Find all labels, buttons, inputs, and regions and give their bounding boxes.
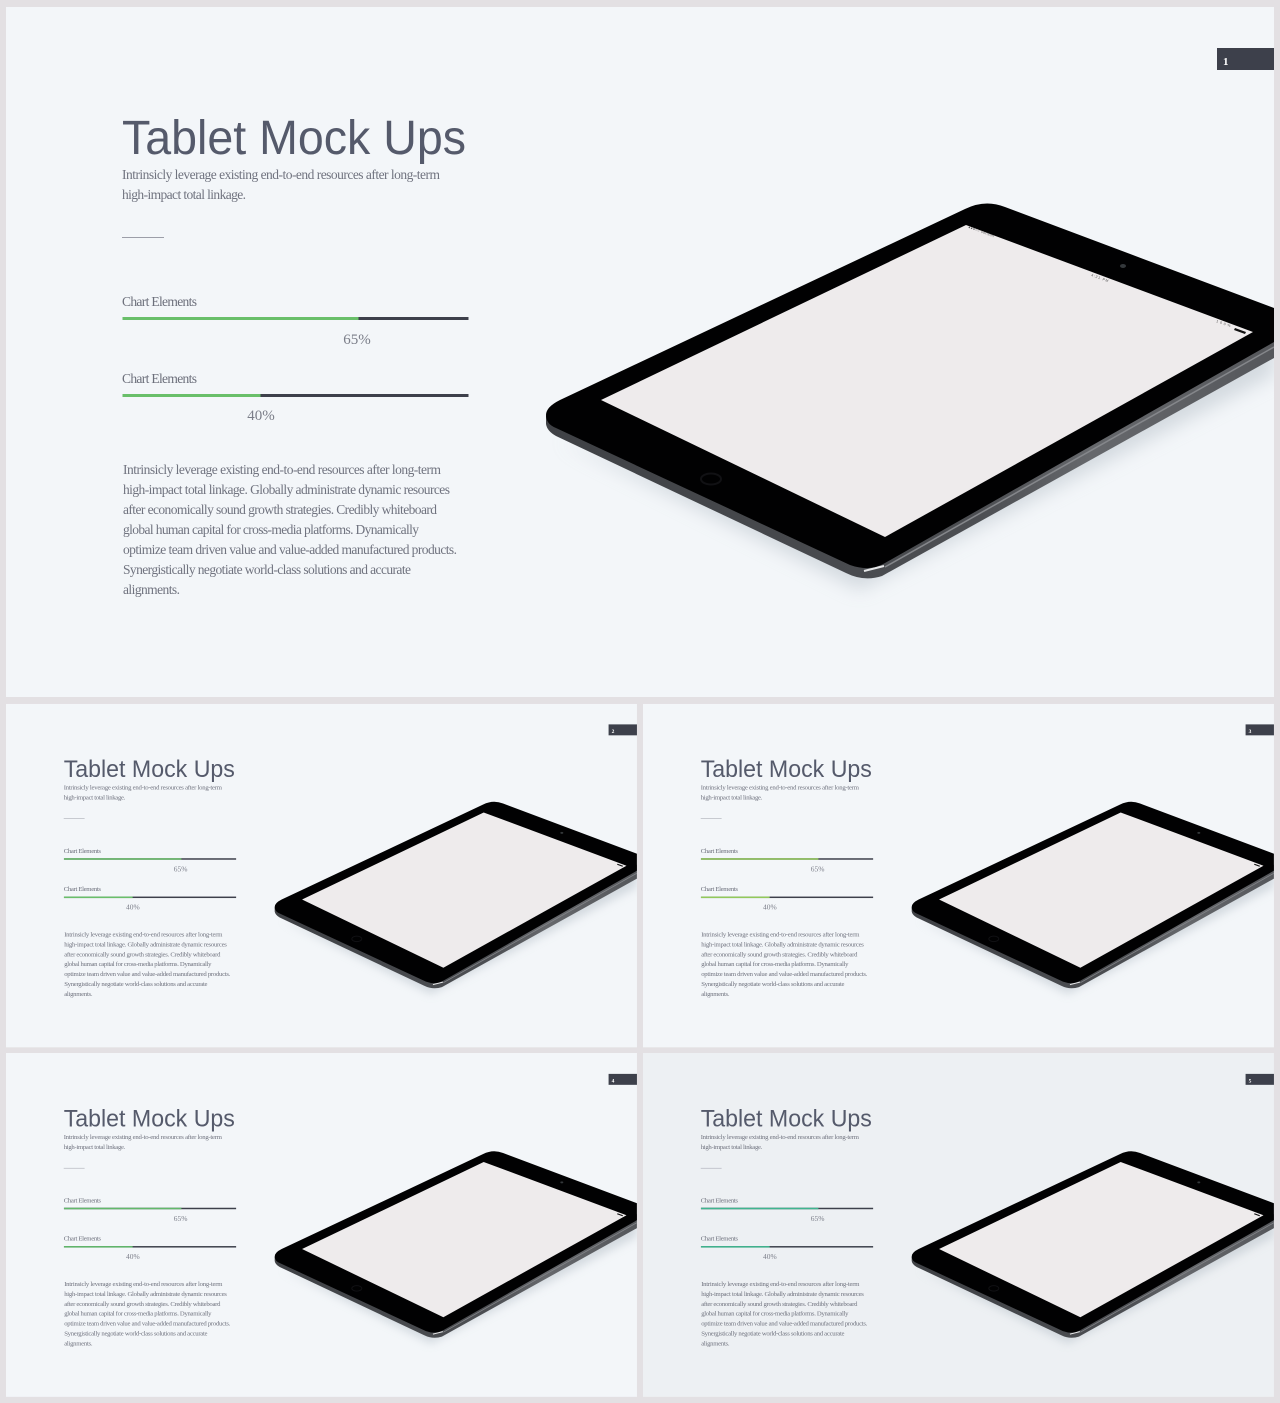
body paragraph: alignments. [64,1341,93,1348]
body paragraph [123,462,457,597]
page number tag 1: 1 [1223,56,1228,68]
subtitle: high-impact total linkage. [64,1144,126,1151]
body paragraph: global human capital for cross-media platforms. Dynamically [123,522,419,537]
progress bar 40%: Chart Elements [701,886,738,893]
progress bar 65% [64,848,236,874]
body paragraph: alignments. [701,991,730,998]
body paragraph: Intrinsicly leverage existing end-to-end resources after long-term [701,1281,860,1288]
subtitle [64,1134,223,1151]
title: Tablet Mock Ups [701,1106,872,1133]
tablet mockup: ●●●○○ Verizon [968,225,994,238]
body paragraph: Synergistically negotiate world-class solutions and accurate [701,981,845,988]
body paragraph: after economically sound growth strategies. Credibly whiteboard [64,1301,221,1308]
subtitle: Intrinsicly leverage existing end-to-end resources after long-term [64,785,223,792]
progress bar 40%: 40% [763,902,777,911]
body paragraph [64,1281,231,1348]
progress bar 40%: Chart Elements [64,886,101,893]
progress bar 65% [701,1197,873,1223]
progress bar 40%: Chart Elements [122,371,197,386]
page number tag 2 [609,724,637,735]
title: Tablet Mock Ups [64,1106,235,1133]
progress bar 65%: 65% [343,332,371,348]
panel: slide 4 [6,1053,637,1397]
subtitle [64,785,223,802]
tablet mockup [275,1151,637,1344]
progress bar 65%: Chart Elements [64,1197,101,1204]
body paragraph: Intrinsicly leverage existing end-to-end resources after long-term [123,462,441,477]
panel: slide 2 [6,704,637,1047]
page number tag 5: 5 [1249,1078,1252,1084]
progress bar 40%: Chart Elements [64,1236,101,1243]
progress bar 65% [701,848,873,874]
page number tag 5 [1246,1074,1274,1085]
progress bar 65%: Chart Elements [122,294,197,309]
progress bar 65%: Chart Elements [701,848,738,855]
body paragraph: global human capital for cross-media platforms. Dynamically [64,1311,212,1318]
subtitle: Intrinsicly leverage existing end-to-end resources after long-term [701,785,860,792]
body paragraph: high-impact total linkage. Globally administrate dynamic resources [701,941,864,948]
progress bar 40% [64,1236,236,1261]
page number tag 3 [1246,724,1274,735]
subtitle [701,1134,860,1151]
page number tag 4: 4 [612,1078,615,1084]
title: Tablet Mock Ups [64,756,235,783]
progress bar 65% [122,294,468,348]
tablet mockup [546,203,1274,590]
subtitle: high-impact total linkage. [701,1144,763,1151]
body paragraph: after economically sound growth strategies. Credibly whiteboard [701,951,858,958]
body paragraph: after economically sound growth strategies. Credibly whiteboard [701,1301,858,1308]
body paragraph: Synergistically negotiate world-class solutions and accurate [701,1331,845,1338]
body paragraph: Synergistically negotiate world-class solutions and accurate [64,1331,208,1338]
body paragraph: high-impact total linkage. Globally administrate dynamic resources [701,1291,864,1298]
body paragraph: alignments. [64,991,93,998]
body paragraph: alignments. [701,1341,730,1348]
subtitle: high-impact total linkage. [122,187,246,202]
progress bar 40%: 40% [763,1252,777,1261]
body paragraph: optimize team driven value and value-added manufactured products. [64,1321,231,1328]
body paragraph [64,931,231,998]
body paragraph: Synergistically negotiate world-class solutions and accurate [64,981,208,988]
subtitle: high-impact total linkage. [701,795,763,802]
panel: slide 3 [643,704,1274,1047]
progress bar 65%: 65% [174,865,187,874]
tablet mockup [912,1151,1274,1344]
body paragraph: global human capital for cross-media platforms. Dynamically [64,961,212,968]
progress bar 40% [701,1236,873,1261]
page number tag 1 [1217,48,1274,70]
body paragraph: global human capital for cross-media platforms. Dynamically [701,1311,849,1318]
progress bar 40% [701,886,873,911]
body paragraph: Intrinsicly leverage existing end-to-end resources after long-term [64,1281,223,1288]
progress bar 65%: Chart Elements [701,1197,738,1204]
body paragraph [701,1281,868,1348]
subtitle: Intrinsicly leverage existing end-to-end resources after long-term [701,1134,860,1141]
body paragraph: Intrinsicly leverage existing end-to-end resources after long-term [701,931,860,938]
body paragraph: high-impact total linkage. Globally administrate dynamic resources [64,941,227,948]
body paragraph: after economically sound growth strategies. Credibly whiteboard [123,502,437,517]
subtitle: high-impact total linkage. [64,795,126,802]
subtitle: Intrinsicly leverage existing end-to-end resources after long-term [122,167,440,182]
progress bar 40% [64,886,236,911]
subtitle [122,167,440,202]
body paragraph: after economically sound growth strategies. Credibly whiteboard [64,951,221,958]
panel: slide 5 [643,1053,1274,1397]
tablet mockup: 100% [1216,319,1231,328]
progress bar 65%: 65% [811,865,824,874]
body paragraph: high-impact total linkage. Globally administrate dynamic resources [64,1291,227,1298]
body paragraph: optimize team driven value and value-added manufactured products. [701,971,868,978]
body paragraph: Synergistically negotiate world-class solutions and accurate [123,562,411,577]
panel: slide 1 [6,7,1274,697]
title: Tablet Mock Ups [701,756,872,783]
progress bar 40%: 40% [247,408,275,424]
body paragraph: Intrinsicly leverage existing end-to-end resources after long-term [64,931,223,938]
progress bar 65%: Chart Elements [64,848,101,855]
body paragraph: optimize team driven value and value-added manufactured products. [123,542,457,557]
body paragraph: global human capital for cross-media platforms. Dynamically [701,961,849,968]
progress bar 40%: 40% [126,902,140,911]
progress bar 40%: 40% [126,1252,140,1261]
page number tag 2: 2 [612,729,615,735]
progress bar 65%: 65% [811,1214,824,1223]
body paragraph: alignments. [123,582,180,597]
tablet mockup: 4:21 PM [1091,273,1109,283]
body paragraph: optimize team driven value and value-added manufactured products. [64,971,231,978]
page number tag 3: 3 [1249,729,1252,735]
body paragraph: high-impact total linkage. Globally administrate dynamic resources [123,482,450,497]
subtitle: Intrinsicly leverage existing end-to-end resources after long-term [64,1134,223,1141]
progress bar 65%: 65% [174,1214,187,1223]
page number tag 4 [609,1074,637,1085]
tablet mockup [912,802,1274,994]
title: Tablet Mock Ups [122,112,466,165]
subtitle [701,785,860,802]
progress bar 40%: Chart Elements [701,1236,738,1243]
progress bar 40% [122,371,468,424]
body paragraph: optimize team driven value and value-added manufactured products. [701,1321,868,1328]
body paragraph [701,931,868,998]
progress bar 65% [64,1197,236,1223]
tablet mockup [275,802,637,994]
